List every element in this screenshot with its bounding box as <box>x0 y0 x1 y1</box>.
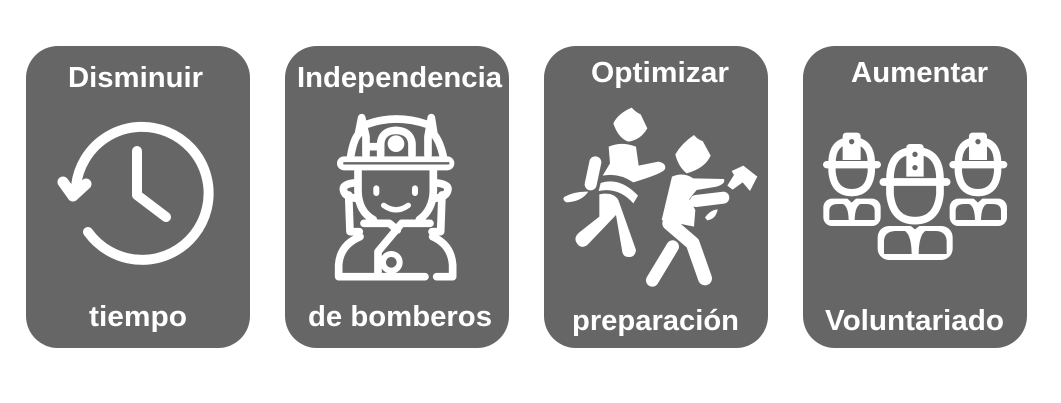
worker right <box>950 133 1007 226</box>
panel: aumentar voluntariado <box>803 46 1027 348</box>
heading: Disminuir: Disminuir <box>68 62 203 94</box>
right runner <box>652 135 757 280</box>
panel: disminuir tiempo <box>26 46 250 348</box>
icon: two running firefighters <box>563 108 757 280</box>
icon: three workers in helmets <box>823 133 1007 260</box>
heading: Aumentar: Aumentar <box>851 57 988 89</box>
left runner <box>563 108 665 257</box>
worker centre <box>878 144 953 260</box>
heading: Optimizar: Optimizar <box>591 57 729 89</box>
label: de bomberos: de bomberos <box>308 301 492 333</box>
panel: independencia de bomberos <box>285 46 509 348</box>
icon: firefighter <box>339 118 453 277</box>
worker left <box>823 133 881 226</box>
panel: optimizar preparación <box>544 46 768 348</box>
heading: Independencia: Independencia <box>297 62 503 94</box>
label: preparación: preparación <box>572 305 739 337</box>
label: Voluntariado: Voluntariado <box>825 305 1004 337</box>
icon: clock with counter-clockwise arrow <box>63 127 209 260</box>
label: tiempo: tiempo <box>89 301 187 333</box>
